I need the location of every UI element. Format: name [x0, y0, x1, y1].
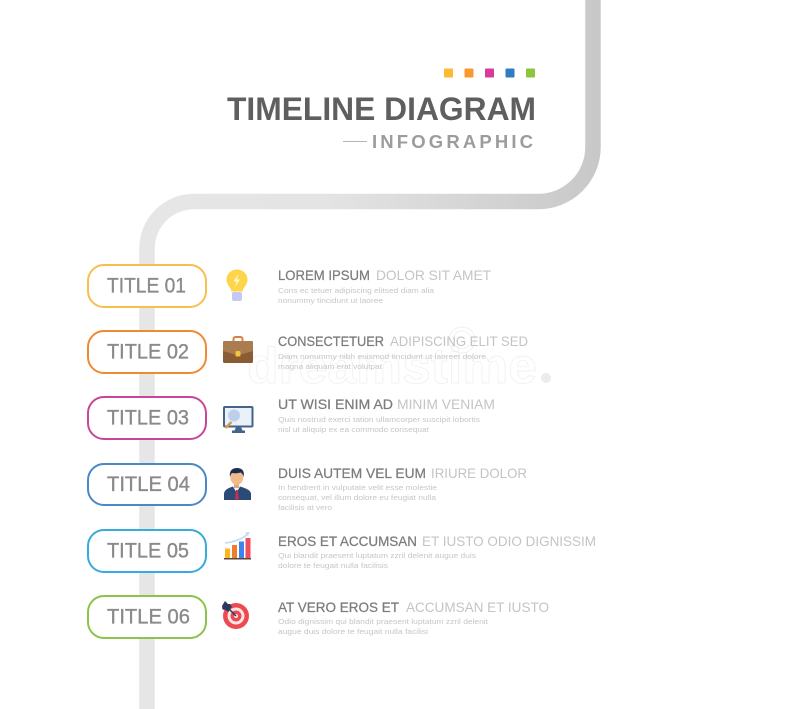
heading 3: UT WISI ENIM AD [278, 396, 393, 412]
description 5: dolore te feugait nulla facilisis [278, 561, 388, 570]
row 4 [88, 464, 527, 512]
description 4: facilisis at vero [278, 503, 332, 512]
description 1: nonummy tincidunt ut laoree [278, 296, 383, 305]
icon: light bulb [226, 270, 248, 301]
heading 1: LOREM IPSUM [278, 267, 370, 283]
description 2 [278, 352, 486, 371]
description 4: In hendrerit in vulputate velit esse molestie [278, 483, 437, 492]
icon: target [222, 601, 249, 629]
heading 3: MINIM VENIAM [397, 396, 495, 412]
heading 2 [278, 333, 528, 349]
row 3 [88, 396, 495, 439]
row 2 [88, 331, 528, 373]
heading 1: DOLOR SIT AMET [376, 267, 491, 283]
pill: title 01 [88, 265, 206, 307]
icon: monitor [224, 407, 252, 433]
description 4: consequat, vel illum dolore eu feugiat nulla [278, 493, 437, 502]
row 5 [88, 530, 596, 572]
pill: title 03: TITLE 03 [107, 406, 189, 430]
heading 5: ET IUSTO ODIO DIGNISSIM [422, 533, 596, 549]
heading 1 [278, 267, 491, 283]
heading 4: DUIS AUTEM VEL EUM [278, 465, 426, 481]
row 1 [88, 265, 491, 307]
row 6 [88, 596, 549, 638]
description 6: Odio dignissim qui blandit praesent luptatum zzril delenit [278, 617, 489, 626]
pill: title 03 [88, 397, 206, 439]
heading 4: IRIURE DOLOR [431, 465, 527, 481]
heading 6: ACCUMSAN ET IUSTO [406, 599, 549, 615]
description 3: nisl ut aliquip ex ea commodo consequat [278, 425, 430, 434]
pill: title 04: TITLE 04 [107, 473, 190, 496]
heading 5: EROS ET ACCUMSAN [278, 533, 417, 549]
pill: title 06 [88, 596, 206, 638]
description 5: Qui blandit praesent luptatum zzril delenit augue duis [278, 551, 476, 560]
description 5 [278, 551, 476, 570]
description 1: Cons ec tetuer adipiscing elitsed diam alia [278, 286, 435, 295]
heading 6: AT VERO EROS ET [278, 599, 399, 615]
subtitle: INFOGRAPHIC [372, 131, 533, 152]
heading 3 [278, 396, 495, 412]
description 3 [278, 415, 480, 434]
heading 6 [278, 599, 549, 615]
heading 2: CONSECTETUER [278, 333, 384, 349]
heading 4 [278, 465, 527, 481]
pill: title 06: TITLE 06 [107, 606, 190, 628]
icon: bar chart [224, 532, 251, 560]
pill: title 01: TITLE 01 [107, 274, 186, 298]
pill: title 05: TITLE 05 [107, 540, 189, 562]
colour squares [444, 68, 535, 78]
description 4 [278, 483, 437, 512]
description 6: augue duis dolore te feugait nulla facilisi [278, 627, 428, 636]
icon: businessman [224, 468, 251, 500]
description 2: magna aliquam erat volutpat [278, 362, 383, 371]
description 2: Diam nonummy nibh euismod tincidunt ut laoreet dolore [278, 352, 486, 361]
heading 5 [278, 533, 596, 549]
pill: title 02 [88, 331, 206, 373]
description 1 [278, 286, 435, 305]
timeline track [147, 0, 593, 709]
icon: briefcase [223, 337, 253, 363]
title: TIMELINE DIAGRAM [227, 91, 536, 127]
watermark: dreamstime [247, 338, 537, 394]
description 6 [278, 617, 489, 636]
pill: title 05 [88, 530, 206, 572]
description 3: Quis nostrud exerci tation ullamcorper suscipit lobortis [278, 415, 480, 424]
heading 2: ADIPISCING ELIT SED [390, 333, 528, 349]
pill: title 04 [88, 464, 206, 505]
pill: title 02: TITLE 02 [107, 340, 189, 364]
